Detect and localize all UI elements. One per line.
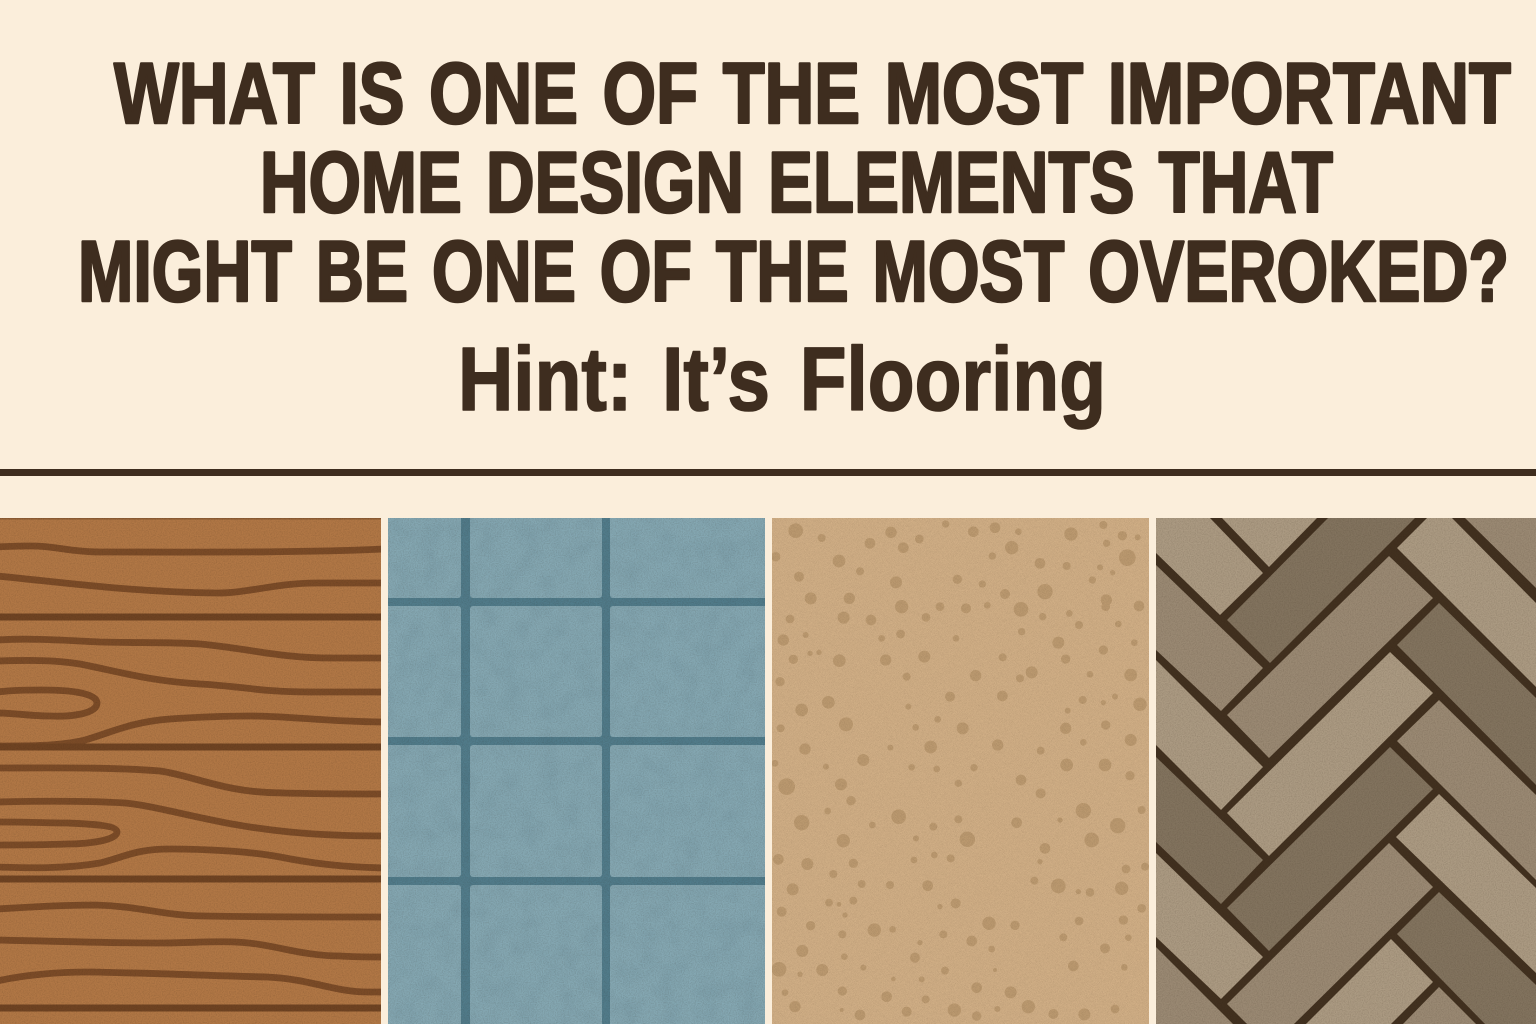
light bricks <box>1156 518 1536 1024</box>
tiles <box>380 510 775 1024</box>
speckles <box>771 520 1149 1021</box>
panel: herringbone flooring <box>1156 518 1536 1024</box>
panel: blue tile flooring <box>388 518 765 1024</box>
wood grain lines <box>0 546 384 992</box>
panel: wood flooring <box>0 518 381 1024</box>
medium bricks <box>1156 518 1536 1024</box>
title <box>78 46 1511 320</box>
subtitle: hint: Hint: It’s Flooring <box>458 330 1106 430</box>
panel: speckled carpet flooring <box>772 518 1149 1024</box>
divider rule <box>0 469 1536 476</box>
dark bricks <box>1156 518 1536 1024</box>
plank seams <box>0 614 381 1012</box>
